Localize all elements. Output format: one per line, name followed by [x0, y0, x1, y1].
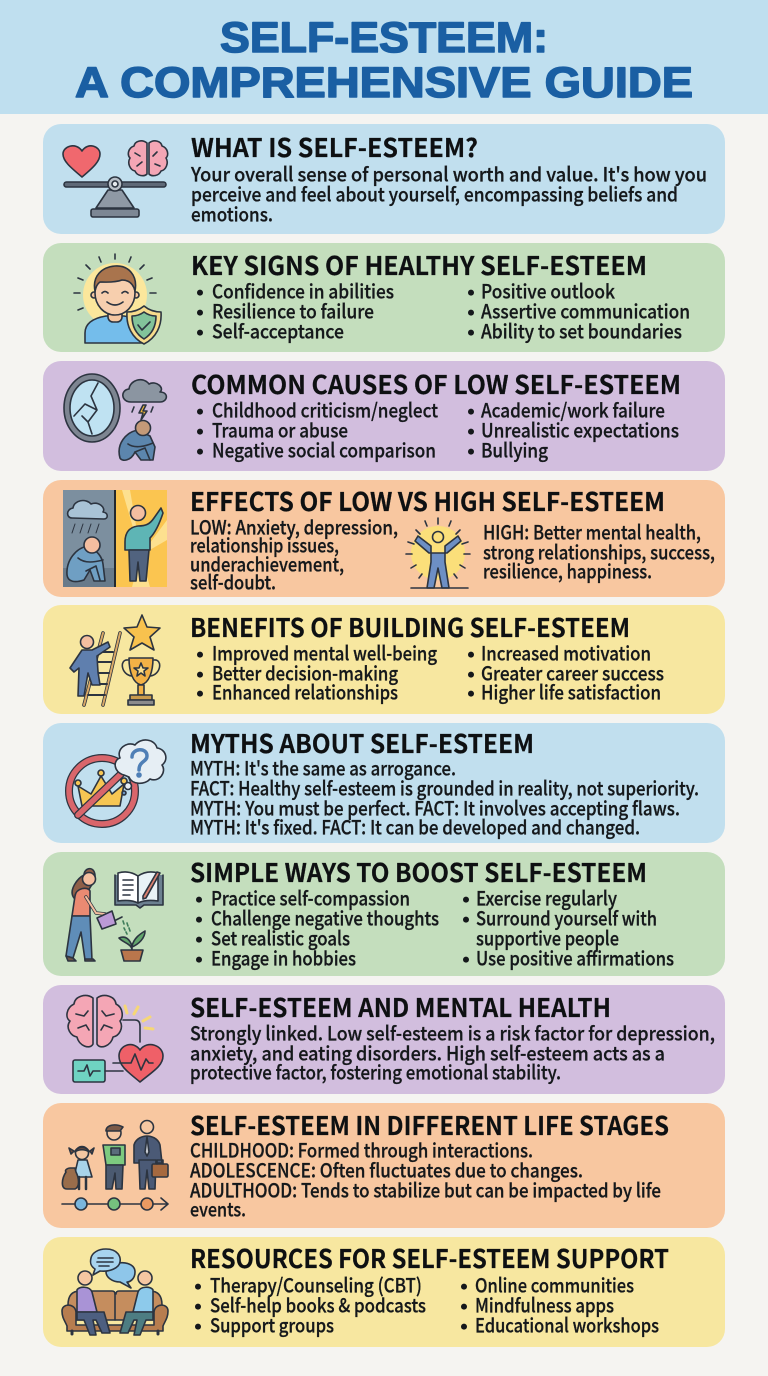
high self-esteem effects: strong relationships, success,	[483, 537, 715, 566]
bullet list left: Practice self-compassion	[211, 883, 410, 912]
bullet list left: Self-acceptance	[212, 316, 344, 345]
panel: what is self-esteem	[43, 124, 725, 234]
life stage descriptions: events.	[190, 1194, 246, 1223]
heading: SELF-ESTEEM AND MENTAL HEALTH	[190, 988, 611, 1025]
bullet list left: Engage in hobbies	[211, 943, 356, 972]
low self-esteem effects: underachievement,	[190, 549, 344, 578]
bullet list right: Greater career success	[481, 658, 664, 687]
icon: two people talking on sofa	[62, 1249, 168, 1335]
panel: resources	[43, 1237, 725, 1347]
header banner with title	[0, 0, 768, 114]
description: anxiety, and eating disorders. High self-esteem acts as a	[190, 1038, 665, 1067]
bullet list right	[461, 1270, 659, 1339]
myths and facts: MYTH: It's the same as arrogance.	[190, 753, 456, 782]
bullet list right: Bullying	[481, 435, 548, 464]
description: emotions.	[191, 199, 273, 228]
description: Strongly linked. Low self-esteem is a risk factor for depression,	[190, 1018, 715, 1047]
bullet list right	[463, 883, 674, 972]
heading: SELF-ESTEEM IN DIFFERENT LIFE STAGES	[190, 1106, 669, 1143]
icon: scale balancing heart and brain	[63, 141, 168, 217]
low self-esteem effects: self-doubt.	[190, 567, 276, 596]
heading: MYTHS ABOUT SELF-ESTEEM	[190, 724, 534, 761]
heading: EFFECTS OF LOW VS HIGH SELF-ESTEEM	[190, 482, 665, 519]
panel: key signs	[43, 243, 725, 352]
bullet list left: Set realistic goals	[211, 923, 350, 952]
bullet list right: Unrealistic expectations	[481, 415, 679, 444]
bullet list right: Use positive affirmations	[476, 943, 674, 972]
bullet list right	[468, 276, 690, 345]
bullet list right: Surround yourself with	[476, 903, 657, 932]
bullet list left	[195, 1270, 426, 1339]
life stage descriptions: CHILDHOOD: Formed through interactions.	[190, 1135, 533, 1164]
bullet list left	[196, 883, 439, 972]
panel: myths	[43, 723, 725, 843]
description: Your overall sense of personal worth and value. It's how you	[190, 159, 707, 188]
bullet list left: Negative social comparison	[212, 435, 436, 464]
life stage descriptions	[190, 1135, 661, 1223]
bullet list right: Mindfulness apps	[475, 1290, 614, 1319]
panel: effects of low vs high	[43, 480, 725, 597]
icon: smiling person with shield	[74, 254, 161, 344]
high self-esteem effects: resilience, happiness.	[483, 556, 652, 585]
life stage descriptions: ADULTHOOD: Tends to stabilize but can be impacted by life	[190, 1175, 661, 1204]
heading: WHAT IS SELF-ESTEEM?	[191, 128, 478, 165]
heading: KEY SIGNS OF HEALTHY SELF-ESTEEM	[191, 246, 647, 283]
bullet list left: Trauma or abuse	[212, 415, 348, 444]
myths and facts	[190, 753, 699, 841]
low self-esteem effects	[190, 512, 398, 596]
bullet list left: Childhood criticism/neglect	[212, 395, 438, 424]
high self-esteem effects	[483, 517, 715, 585]
panel: common causes	[43, 361, 725, 471]
bullet list right: Assertive communication	[481, 296, 690, 325]
bullet list left: Enhanced relationships	[212, 677, 398, 706]
panel: life stages	[43, 1103, 725, 1228]
bullet list left: Confidence in abilities	[212, 276, 394, 305]
bullet list right: Increased motivation	[481, 638, 651, 667]
header banner with title: SELF-ESTEEM:	[220, 14, 548, 62]
bullet list left	[197, 276, 394, 345]
bullet list left: Improved mental well-being	[212, 638, 437, 667]
panel: benefits	[43, 605, 725, 714]
bullet list right: Academic/work failure	[481, 395, 665, 424]
heading: RESOURCES FOR SELF-ESTEEM SUPPORT	[190, 1239, 669, 1276]
description: perceive and feel about yourself, encompassing beliefs and	[191, 179, 678, 208]
description: protective factor, fostering emotional stability.	[190, 1057, 561, 1086]
bullet list left	[197, 395, 438, 464]
bullet list left: Therapy/Counseling (CBT)	[210, 1270, 422, 1299]
icon: person climbing ladder toward star and trophy	[70, 615, 160, 705]
icon: child, teen and adult on timeline	[62, 1120, 168, 1210]
bullet list right	[468, 638, 664, 706]
bullet list right: Educational workshops	[475, 1310, 659, 1339]
header banner with title: A COMPREHENSIVE GUIDE	[75, 59, 693, 107]
heading: SIMPLE WAYS TO BOOST SELF-ESTEEM	[190, 853, 647, 890]
bullet list left: Resilience to failure	[212, 296, 374, 325]
icon: woman watering plant with journal	[66, 869, 163, 961]
panel: simple ways to boost	[43, 852, 725, 976]
low self-esteem effects: LOW: Anxiety, depression,	[190, 512, 398, 541]
myths and facts: MYTH: You must be perfect. FACT: It involves accepting flaws.	[190, 793, 680, 822]
icon: crossed-out crown with question cloud	[69, 740, 166, 824]
high self-esteem effects: HIGH: Better mental health,	[483, 517, 701, 546]
low self-esteem effects: relationship issues,	[190, 530, 339, 559]
bullet list left: Support groups	[210, 1310, 334, 1339]
bullet list right: Exercise regularly	[476, 883, 617, 912]
myths and facts: MYTH: It's fixed. FACT: It can be developed and changed.	[190, 812, 640, 841]
panel: mental health	[43, 985, 725, 1094]
heading: COMMON CAUSES OF LOW SELF-ESTEEM	[191, 365, 681, 402]
description	[190, 159, 707, 228]
bullet list right: supportive people	[476, 923, 619, 952]
bullet list right	[468, 395, 679, 464]
bullet list left: Challenge negative thoughts	[211, 903, 439, 932]
life stage descriptions: ADOLESCENCE: Often fluctuates due to changes.	[190, 1155, 583, 1184]
bullet list left	[197, 638, 437, 706]
bullet list right: Ability to set boundaries	[481, 316, 682, 345]
bullet list right: Positive outlook	[481, 276, 616, 305]
description	[190, 1018, 715, 1086]
heading: BENEFITS OF BUILDING SELF-ESTEEM	[190, 608, 630, 645]
bullet list left: Better decision-making	[212, 658, 398, 687]
icon: brain linked to heart and monitor	[67, 996, 163, 1082]
bullet list right: Online communities	[475, 1270, 634, 1299]
icon: confident person with arms raised	[406, 518, 470, 588]
bullet list left: Self-help books & podcasts	[210, 1290, 426, 1319]
icon: low mood and high mood split scene	[63, 490, 167, 587]
bullet list right: Higher life satisfaction	[481, 677, 661, 706]
myths and facts: FACT: Healthy self-esteem is grounded in reality, not superiority.	[190, 773, 699, 802]
icon: cracked mirror, storm cloud, sad person	[64, 374, 166, 460]
